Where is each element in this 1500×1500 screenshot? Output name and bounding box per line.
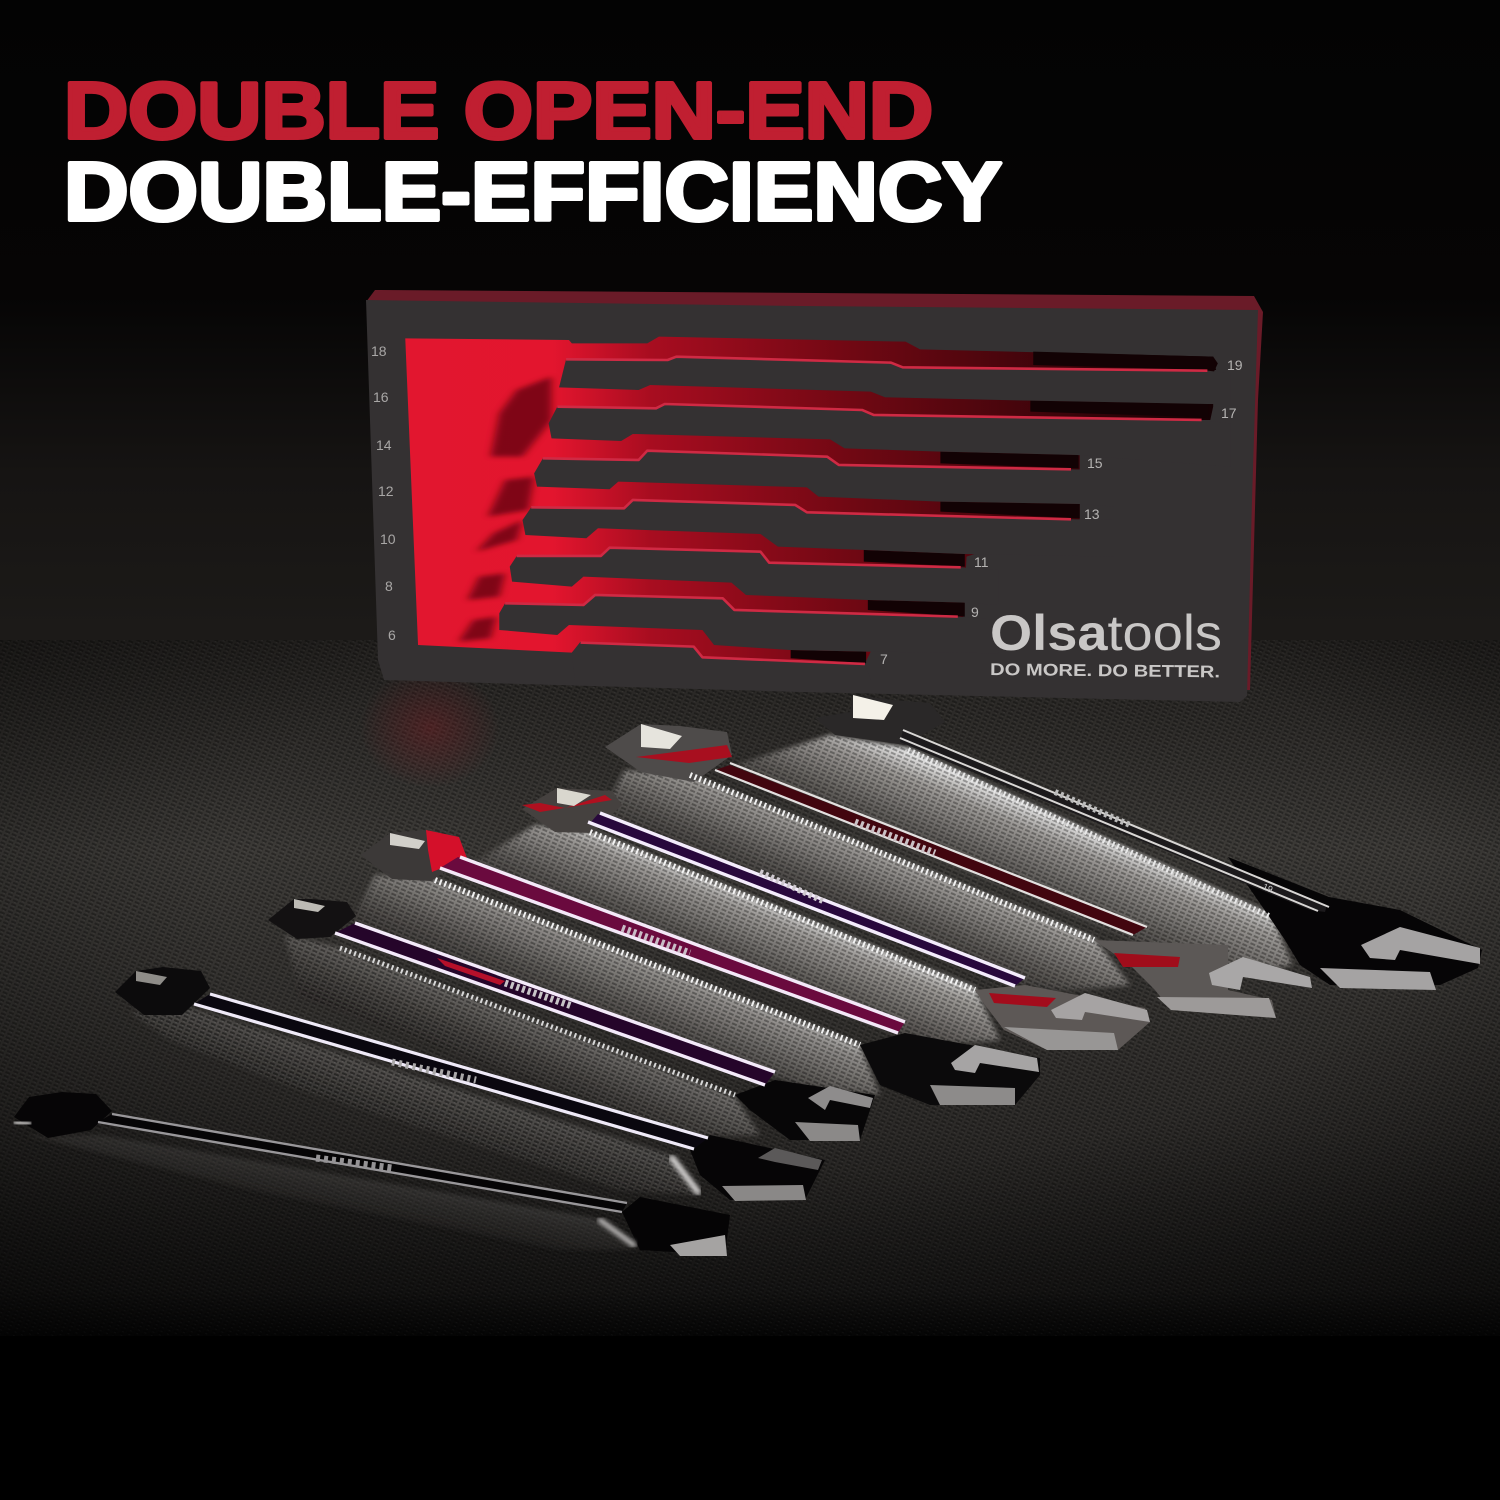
- right head: [735, 1080, 875, 1140]
- shaft: [440, 857, 905, 1033]
- left edge highlight: [15, 1122, 30, 1124]
- rails: [900, 730, 1329, 911]
- red shaft reflection: [437, 958, 505, 985]
- wrench 10-11: [268, 899, 875, 1141]
- shaft: [715, 765, 1147, 935]
- right jaw upper: [1209, 957, 1312, 990]
- left size numbers: 6: [388, 627, 396, 643]
- reflection 1: [735, 735, 1292, 975]
- left size numbers: [371, 343, 396, 643]
- red cavity: [405, 337, 1218, 663]
- title line 1: DOUBLE OPEN-END: [64, 66, 933, 155]
- right jaw lower: [722, 1185, 806, 1201]
- title line 2: DOUBLE-EFFICIENCY: [64, 145, 1002, 238]
- left size numbers: 12: [378, 483, 394, 499]
- size mark: 19: [1261, 882, 1274, 895]
- logo stamp: [855, 822, 935, 853]
- red head panel: [426, 830, 467, 872]
- logo tagline: DO MORE. DO BETTER.: [990, 660, 1220, 681]
- right size numbers: [880, 357, 1243, 667]
- wrench reflections: [25, 735, 1292, 1250]
- right size numbers: 15: [1087, 455, 1103, 471]
- rails: [335, 923, 775, 1085]
- knurled edge: [690, 775, 1094, 940]
- left size numbers: 14: [376, 437, 392, 453]
- right jaws: [1320, 927, 1480, 990]
- knurled edge: [435, 880, 860, 1045]
- right head: [860, 1033, 1040, 1105]
- shaft: [194, 994, 708, 1149]
- reflection weave texture: [130, 735, 1292, 1195]
- left head: [14, 1092, 112, 1138]
- background wall: [0, 0, 1500, 660]
- red reflection: [989, 993, 1056, 1007]
- floor mat: [0, 640, 1500, 1500]
- left head: [115, 967, 210, 1015]
- rails: [98, 1114, 627, 1212]
- logo stamp: [316, 1158, 392, 1168]
- rails: [588, 813, 1025, 986]
- right head: [975, 985, 1150, 1050]
- red head reflection: [636, 745, 732, 763]
- bright bend: [600, 1220, 634, 1245]
- reflection 4: [350, 875, 880, 1095]
- left jaw highlight: [641, 724, 682, 749]
- logo stamp: [505, 983, 572, 1006]
- logo stamp: [622, 928, 690, 953]
- title: [64, 66, 1002, 238]
- right head: [1228, 857, 1482, 985]
- right jaw upper: [808, 1086, 873, 1110]
- knurled edge: [908, 750, 1271, 917]
- rails: [440, 857, 905, 1033]
- left jaw highlight: [294, 899, 325, 912]
- brand logo: [990, 605, 1222, 681]
- right jaw lower: [1157, 997, 1276, 1018]
- shaft: [335, 923, 775, 1085]
- shaft: [591, 814, 1025, 986]
- right jaw lower: [930, 1085, 1015, 1105]
- left jaw highlight: [557, 788, 591, 806]
- left head: [815, 695, 945, 745]
- right size numbers: 7: [880, 651, 888, 667]
- right size numbers: 17: [1221, 405, 1237, 421]
- red reflection: [1114, 953, 1180, 967]
- slot highlights: [505, 357, 1207, 664]
- wrench 16-17: [605, 724, 1312, 1018]
- left size numbers: 16: [373, 389, 389, 405]
- right size numbers: 19: [1227, 357, 1243, 373]
- logo stamp: [1055, 792, 1130, 825]
- wrench 8-9: [115, 967, 825, 1201]
- right jaw lower: [1004, 1027, 1118, 1050]
- reflection 6: [130, 1008, 700, 1195]
- bright bend: [672, 1158, 698, 1192]
- tray red rim: [366, 290, 1263, 690]
- shaft: [900, 730, 1327, 912]
- red head reflection: [522, 795, 612, 812]
- right jaw lower: [670, 1235, 727, 1256]
- left jaw highlight: [136, 971, 167, 985]
- right head: [622, 1197, 730, 1255]
- cavity shadows: [459, 377, 552, 642]
- right head: [1094, 940, 1276, 1018]
- tray foam body: [366, 300, 1258, 702]
- right size numbers: 9: [971, 604, 979, 620]
- knurled edge: [590, 832, 975, 990]
- dark slot ends: [791, 352, 1216, 663]
- right jaw lower: [795, 1122, 860, 1141]
- wrench 18-19: [815, 695, 1482, 990]
- wrench 14-15: [522, 788, 1150, 1050]
- logo stamp: [760, 872, 825, 902]
- foam tray: [366, 290, 1263, 702]
- reflection 2: [600, 770, 1130, 990]
- rails: [194, 994, 708, 1149]
- reflection 3: [470, 825, 1000, 1045]
- logo stamp: [392, 1062, 476, 1080]
- right jaw upper: [1051, 993, 1150, 1022]
- knurled edge: [340, 948, 735, 1095]
- left size numbers: 8: [385, 578, 393, 594]
- left head: [522, 788, 622, 833]
- right jaw upper: [758, 1148, 822, 1170]
- left size numbers: 10: [380, 531, 396, 547]
- right jaw upper: [951, 1045, 1039, 1073]
- left head: [605, 724, 732, 782]
- left jaw highlight: [853, 695, 893, 720]
- right size numbers: 13: [1084, 506, 1100, 522]
- left head: [268, 899, 356, 939]
- wrench 12-13: [361, 830, 1040, 1105]
- right size numbers: 11: [974, 554, 989, 570]
- left size numbers: 18: [371, 343, 387, 359]
- logo wordmark: Olsatools: [990, 605, 1222, 661]
- wrench 6-7: [14, 1092, 730, 1256]
- rails: [715, 763, 1147, 935]
- left head: [361, 830, 467, 881]
- left jaw highlight: [390, 833, 425, 849]
- reflection 5: [285, 935, 760, 1135]
- foam fingers: [499, 357, 1231, 680]
- reflection 7: [25, 1135, 640, 1250]
- right head: [690, 1135, 825, 1200]
- tray cavity and wrench slots: [405, 337, 1231, 680]
- shaft: [98, 1114, 627, 1212]
